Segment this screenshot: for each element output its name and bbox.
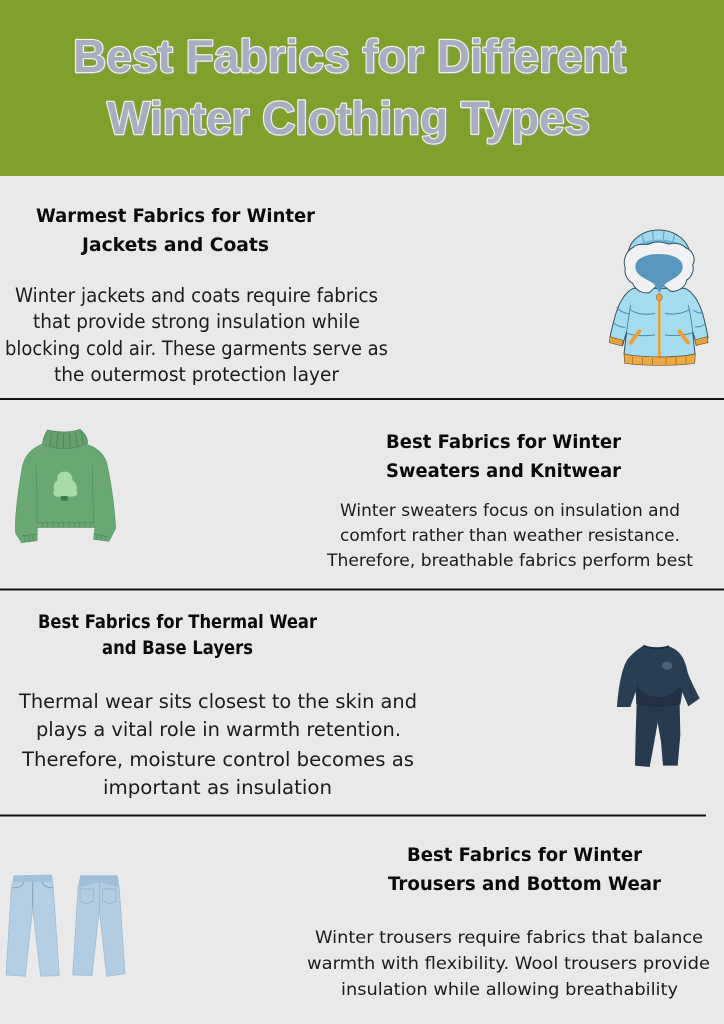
heading: jackets and coats: Jackets and Coats xyxy=(80,234,269,256)
text: thermal wear: Thermal wear sits closest to the skin and xyxy=(18,690,417,713)
heading: jackets and coats: Warmest Fabrics for Winter xyxy=(36,205,316,227)
text: jackets and coats: the outermost protection layer xyxy=(54,363,340,386)
title xyxy=(73,30,626,144)
text: thermal wear xyxy=(18,690,417,799)
heading: thermal wear: and Base Layers xyxy=(102,637,253,659)
title banner xyxy=(0,0,724,176)
heading: jackets and coats xyxy=(36,205,316,256)
icon: blue winter jacket xyxy=(609,230,708,365)
text: sweaters and knitwear: Therefore, breathable fabrics perform best xyxy=(326,551,693,571)
heading: trousers xyxy=(388,844,662,895)
heading: thermal wear xyxy=(38,611,318,659)
title: Winter Clothing Types xyxy=(107,92,590,144)
panel: trousers and bottom wear xyxy=(6,844,710,1000)
text: jackets and coats: that provide strong insulation while xyxy=(33,310,360,333)
title: Best Fabrics for Different xyxy=(73,30,626,82)
panel: thermal wear and base layers xyxy=(18,611,700,799)
heading: trousers: Trousers and Bottom Wear xyxy=(388,873,662,895)
text: thermal wear: Therefore, moisture control becomes as xyxy=(21,748,414,771)
heading: sweaters and knitwear: Sweaters and Knitwear xyxy=(386,460,622,482)
heading: trousers: Best Fabrics for Winter xyxy=(407,844,643,866)
text: sweaters and knitwear: comfort rather than weather resistance. xyxy=(340,526,680,546)
text: jackets and coats: Winter jackets and coats require fabrics xyxy=(15,284,378,307)
text: trousers: Winter trousers require fabrics that balance xyxy=(315,928,703,948)
text: sweaters and knitwear xyxy=(326,501,693,571)
text: jackets and coats xyxy=(5,284,388,386)
heading: sweaters and knitwear xyxy=(386,431,622,482)
text: jackets and coats: blocking cold air. These garments serve as xyxy=(5,337,388,360)
panel: sweaters and knitwear xyxy=(15,429,693,571)
text: trousers: insulation while allowing breathability xyxy=(341,980,678,1000)
text: thermal wear: plays a vital role in warmth retention. xyxy=(36,718,401,741)
heading: thermal wear: Best Fabrics for Thermal Wear xyxy=(38,611,318,633)
text: trousers xyxy=(307,928,710,1000)
icon: dark thermal set xyxy=(617,646,700,767)
text: thermal wear: important as insulation xyxy=(103,776,332,799)
panel: jackets and coats xyxy=(5,205,708,386)
icon: jeans front and back xyxy=(6,875,125,976)
text: trousers: warmth with flexibility. Wool trousers provide xyxy=(307,954,710,974)
heading: sweaters and knitwear: Best Fabrics for Winter xyxy=(386,431,622,453)
text: sweaters and knitwear: Winter sweaters focus on insulation and xyxy=(340,501,680,521)
icon: green sweater xyxy=(15,429,116,543)
